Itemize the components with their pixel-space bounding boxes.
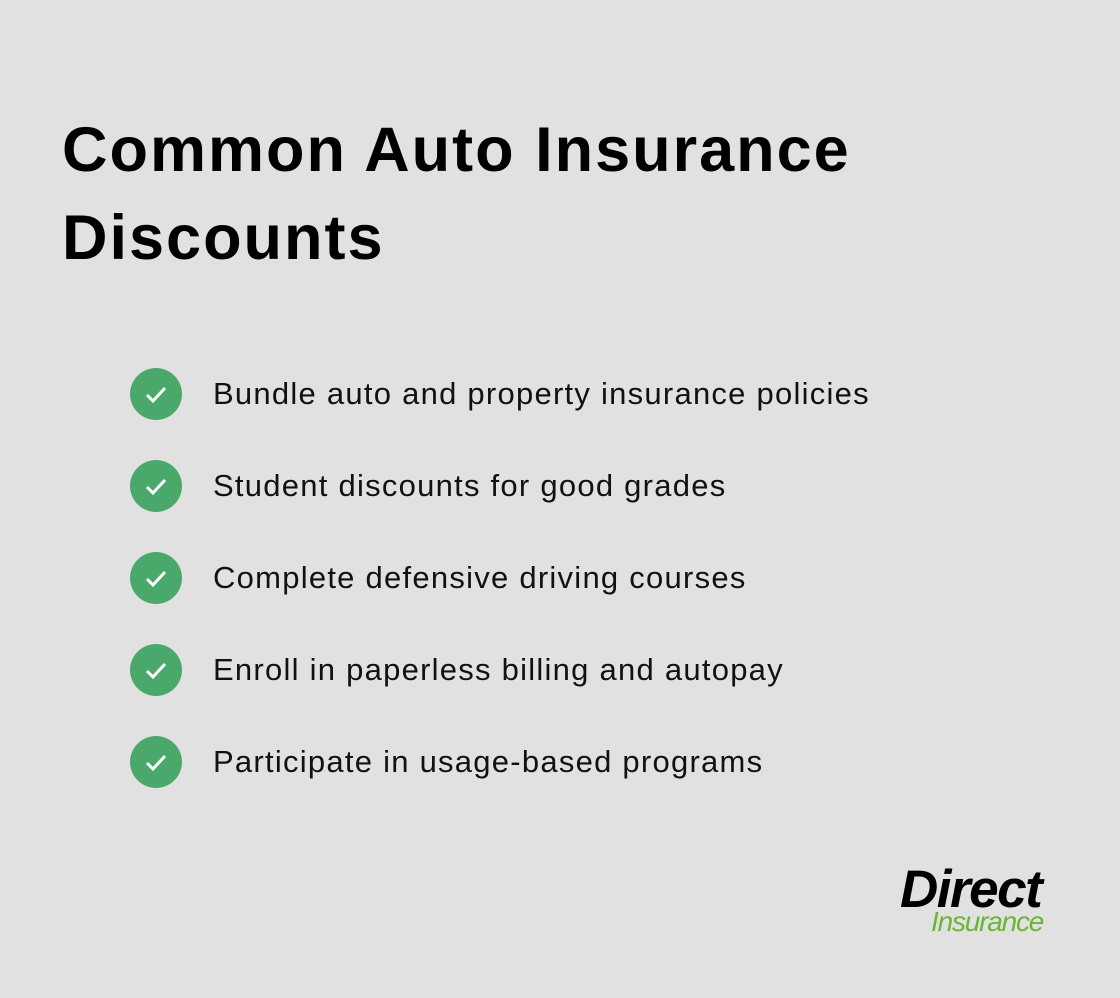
logo: Insurance: [931, 906, 1044, 937]
list item 4: [130, 644, 784, 696]
title: Common Auto Insurance: [62, 115, 851, 185]
list item 5: Participate in usage-based programs: [213, 744, 763, 779]
title: [62, 115, 851, 273]
list item 2: [130, 460, 726, 512]
list item 4: Enroll in paperless billing and autopay: [213, 652, 784, 687]
list item 5: [130, 736, 763, 788]
list item 1: [130, 368, 870, 420]
list item 2: Student discounts for good grades: [213, 468, 726, 503]
list item 1: Bundle auto and property insurance policies: [213, 376, 870, 411]
list item 3: Complete defensive driving courses: [213, 560, 747, 595]
title: Discounts: [62, 203, 385, 273]
list item 3: [130, 552, 747, 604]
